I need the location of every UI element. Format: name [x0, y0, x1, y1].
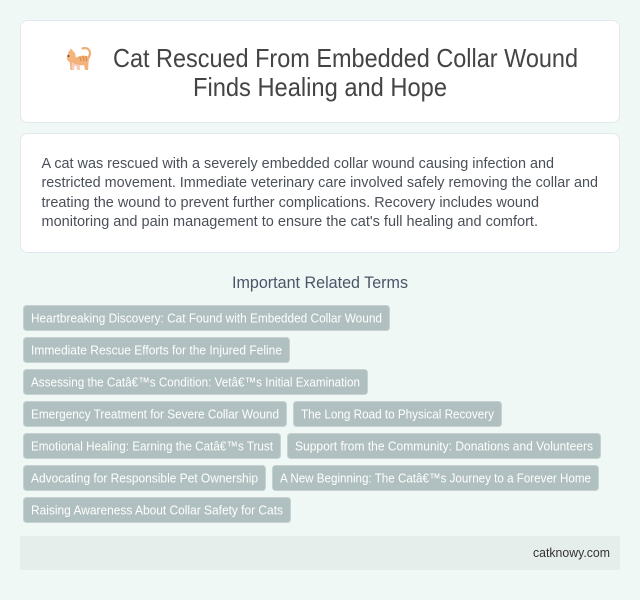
footer site name: catknowy.com — [533, 545, 610, 560]
tag: emotional healing — [24, 434, 280, 458]
tag: immediate rescue: Immediate Rescue Efforts for the Injured Feline — [31, 342, 282, 358]
summary text: restricted movement. Immediate veterinary care involved safely removing the collar and — [42, 174, 598, 191]
footer bar — [20, 536, 620, 570]
tag: raising awareness: Raising Awareness About Collar Safety for Cats — [31, 502, 283, 518]
summary text: monitoring and pain management to ensure the cat's full healing and comfort. — [42, 213, 538, 230]
title: Cat Rescued From Embedded Collar Wound — [113, 43, 578, 73]
title — [113, 43, 578, 102]
tag: emergency treatment: Emergency Treatment for Severe Collar Wound — [31, 406, 279, 422]
tag: community support — [288, 434, 600, 458]
summary text: A cat was rescued with a severely embedded collar wound causing infection and — [42, 155, 554, 172]
title: Finds Healing and Hope — [193, 72, 447, 102]
icon: cat — [67, 48, 90, 70]
tag: emotional healing: Emotional Healing: Earning the Catâ€™s Trust — [31, 438, 273, 454]
tag: heartbreaking discovery — [24, 306, 390, 330]
tag: heartbreaking discovery: Heartbreaking Discovery: Cat Found with Embedded Collar Wound — [31, 310, 382, 326]
tag: new beginning: A New Beginning: The Catâ€™s Journey to a Forever Home — [280, 470, 591, 486]
panel: related term tags — [24, 306, 600, 522]
tag: emergency treatment — [24, 402, 286, 426]
summary text — [42, 155, 598, 230]
summary text: treating the wound to prevent further complications. Recovery includes wound — [42, 194, 539, 211]
tag: assessing condition: Assessing the Catâ€™s Condition: Vetâ€™s Initial Examination — [31, 374, 360, 390]
heading: important related terms: Important Related Terms — [232, 274, 408, 292]
tag: raising awareness — [24, 498, 290, 522]
panel: title card — [20, 20, 620, 122]
tag: assessing condition — [24, 370, 368, 394]
tag: physical recovery: The Long Road to Physical Recovery — [301, 406, 494, 422]
tag: responsible ownership — [24, 466, 266, 490]
tag: new beginning — [272, 466, 598, 490]
tag: immediate rescue — [24, 338, 290, 362]
tag: community support: Support from the Community: Donations and Volunteers — [295, 438, 593, 454]
panel: summary card — [20, 134, 620, 252]
tag: responsible ownership: Advocating for Responsible Pet Ownership — [31, 470, 258, 486]
tag: physical recovery — [294, 402, 502, 426]
